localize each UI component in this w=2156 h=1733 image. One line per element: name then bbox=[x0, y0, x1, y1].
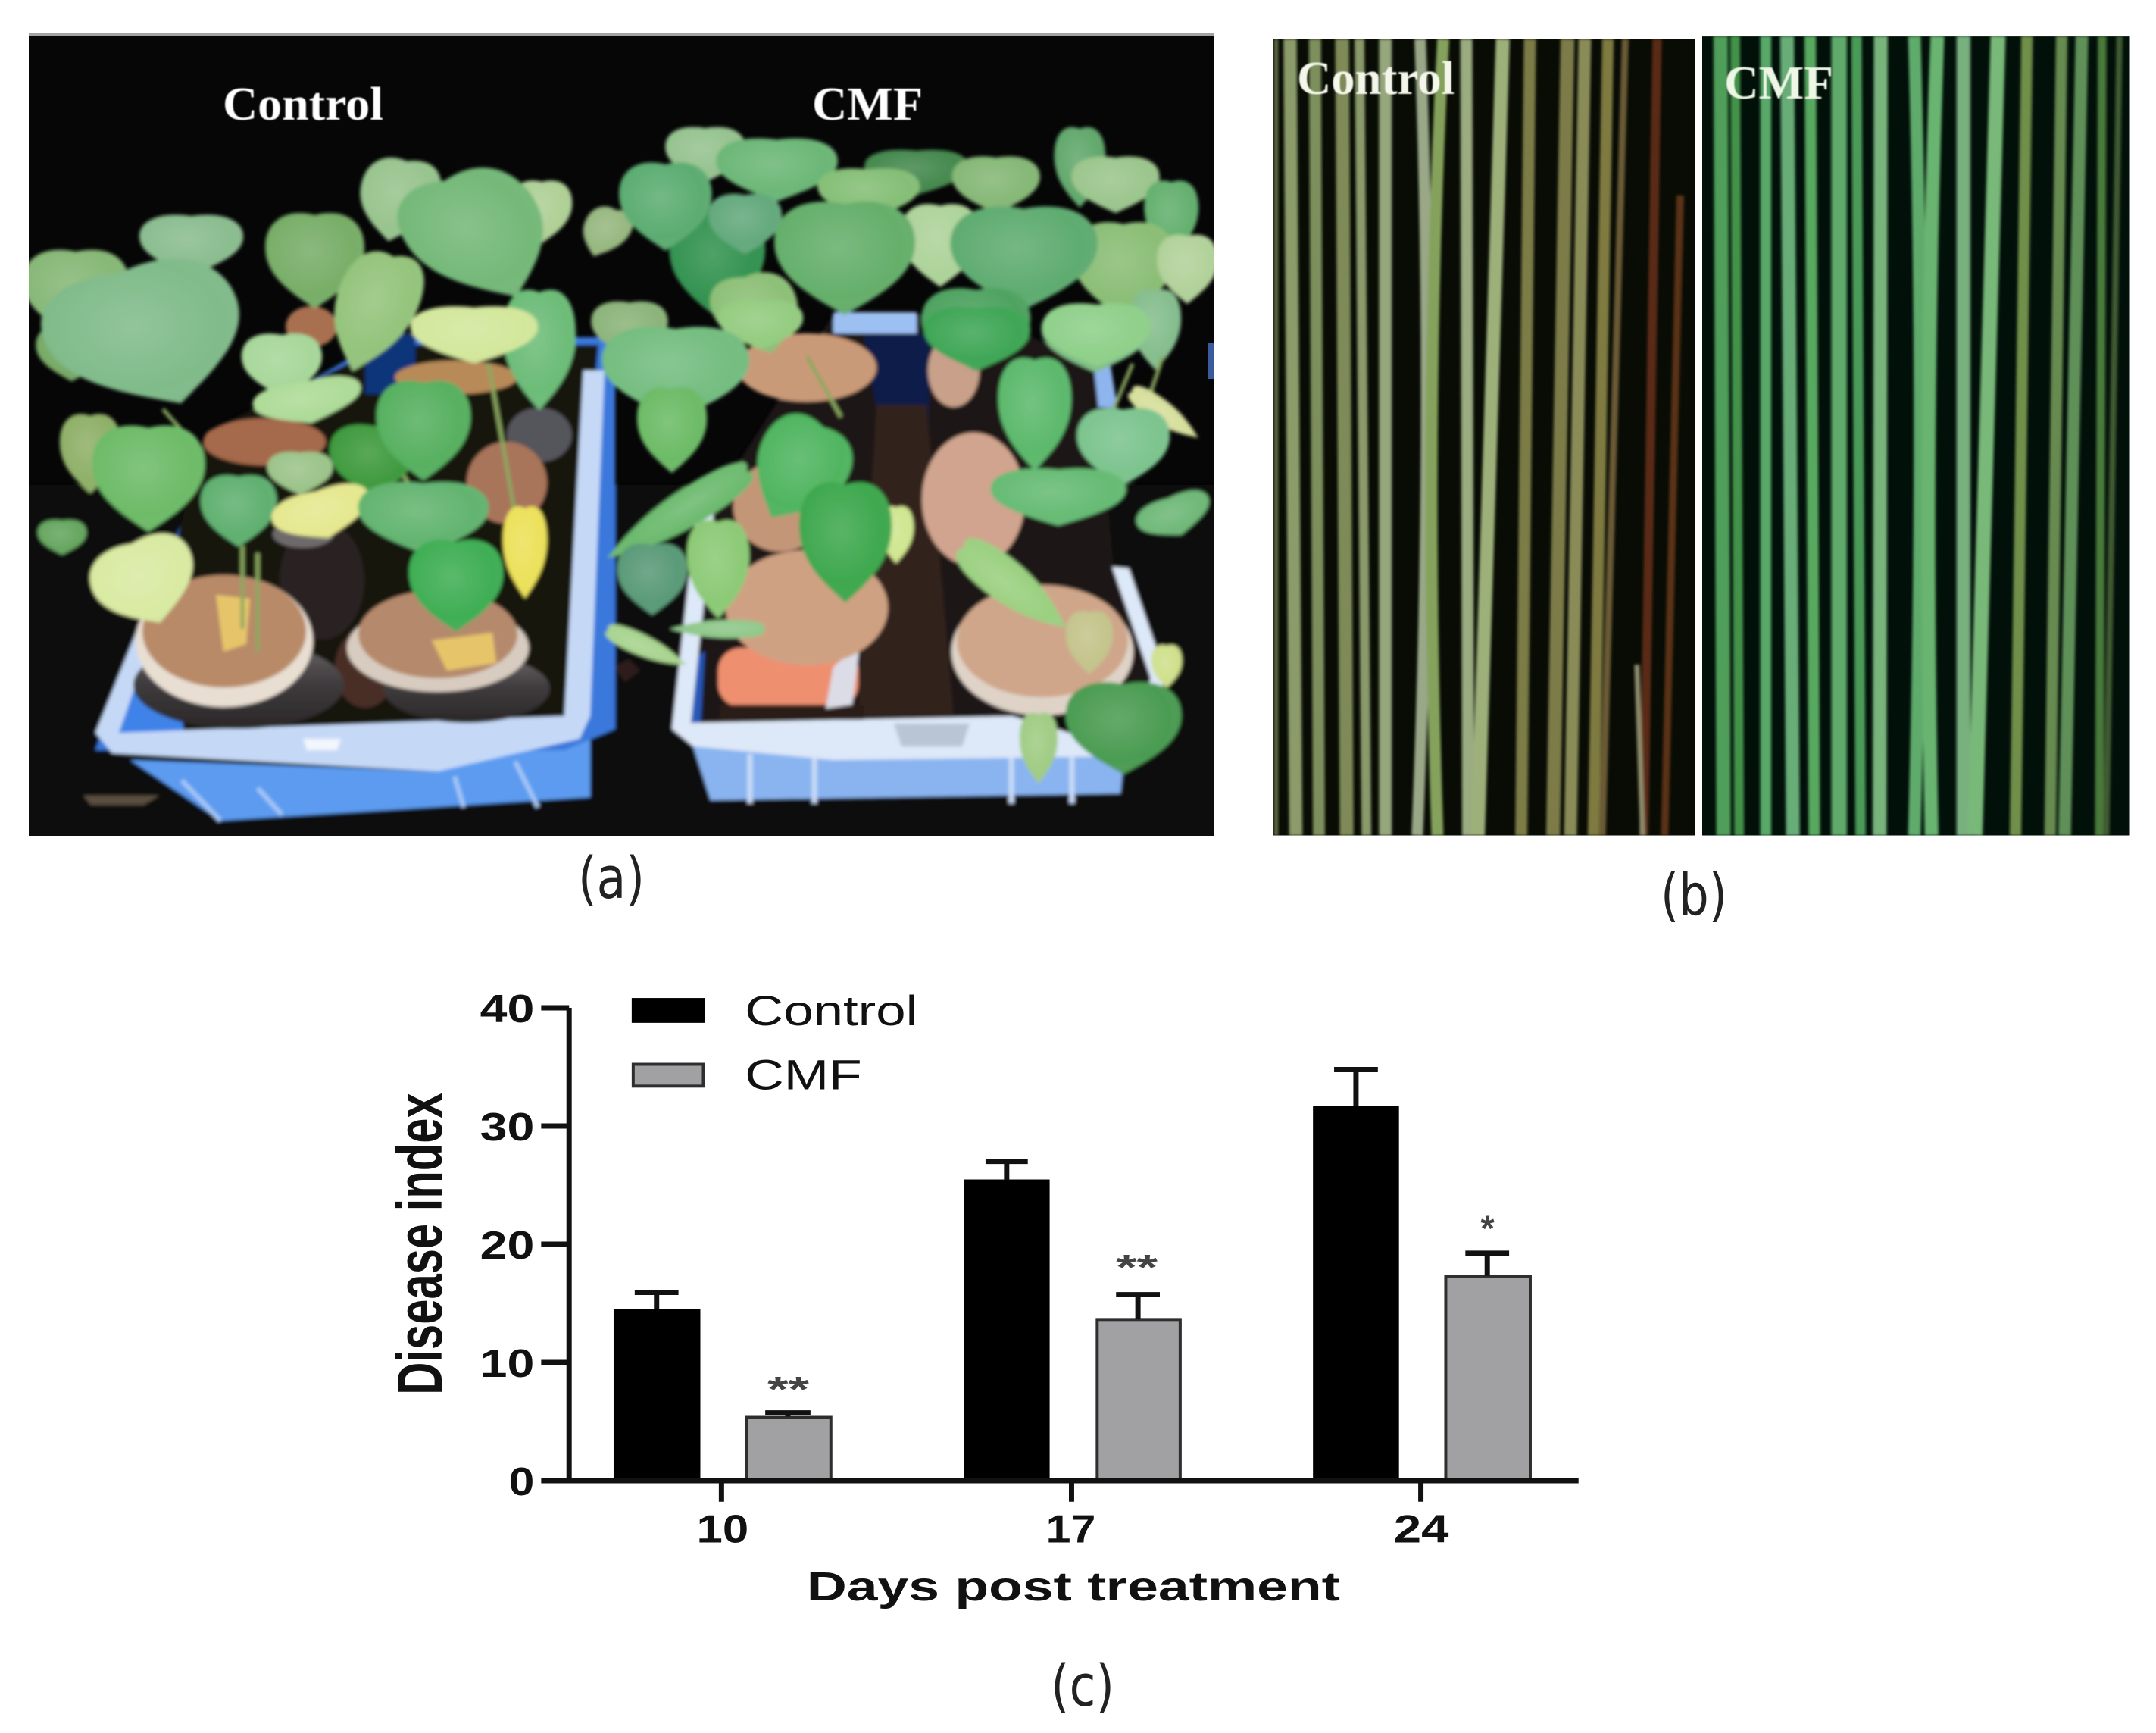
y tick labels bbox=[480, 987, 534, 1503]
left plant upper leaves bbox=[23, 154, 639, 429]
CMF stems bbox=[1702, 33, 2130, 836]
label: CMF (b): CMF bbox=[1724, 58, 1833, 109]
label: Control (b): Control bbox=[1297, 53, 1455, 105]
control stems bbox=[1273, 39, 1695, 836]
y tick labels: 20 bbox=[480, 1223, 534, 1267]
x tick labels: 17 bbox=[1046, 1506, 1095, 1550]
stems bbox=[163, 356, 1163, 652]
bars: CMF bbox=[746, 1277, 1530, 1481]
right plant lower leaves bbox=[597, 300, 1217, 784]
label: Control (a): Control bbox=[223, 79, 383, 130]
right tray bbox=[672, 312, 1167, 803]
x axis title: Days post treatment bbox=[807, 1564, 1340, 1609]
panel a: cotton plant photo bbox=[23, 33, 1217, 836]
y tick labels: 10 bbox=[480, 1341, 534, 1385]
pots bbox=[133, 306, 1133, 729]
bar chart: disease index bbox=[383, 987, 1579, 1609]
caption (b): (b) bbox=[1661, 861, 1727, 928]
x tick labels: 10 bbox=[697, 1506, 748, 1550]
caption (a): (a) bbox=[578, 844, 645, 912]
significance stars bbox=[767, 1209, 1495, 1410]
panel b: stem photos bbox=[1273, 33, 2130, 836]
significance stars: ** bbox=[1116, 1248, 1158, 1288]
error bars bbox=[635, 1069, 1509, 1417]
legend: Control bbox=[745, 987, 917, 1034]
bars: control bbox=[614, 1106, 1399, 1481]
left tray bbox=[95, 333, 615, 821]
legend: CMF bbox=[745, 1051, 862, 1098]
label: CMF (a): CMF bbox=[812, 79, 923, 130]
axes bbox=[541, 1008, 1579, 1502]
x tick labels bbox=[697, 1506, 1449, 1550]
y tick labels: 30 bbox=[480, 1105, 534, 1149]
y tick labels: 40 bbox=[480, 987, 534, 1031]
legend bbox=[632, 987, 917, 1098]
upper foliage bbox=[23, 127, 1217, 429]
x tick labels: 24 bbox=[1394, 1506, 1449, 1550]
right plant upper leaves bbox=[591, 127, 1217, 373]
significance stars: ** bbox=[767, 1370, 810, 1410]
left plant lower leaves bbox=[38, 289, 576, 641]
caption (c): (c) bbox=[1051, 1652, 1114, 1719]
y axis title: Disease index bbox=[383, 1093, 455, 1395]
y tick labels: 0 bbox=[509, 1459, 534, 1503]
significance stars: * bbox=[1480, 1209, 1495, 1249]
